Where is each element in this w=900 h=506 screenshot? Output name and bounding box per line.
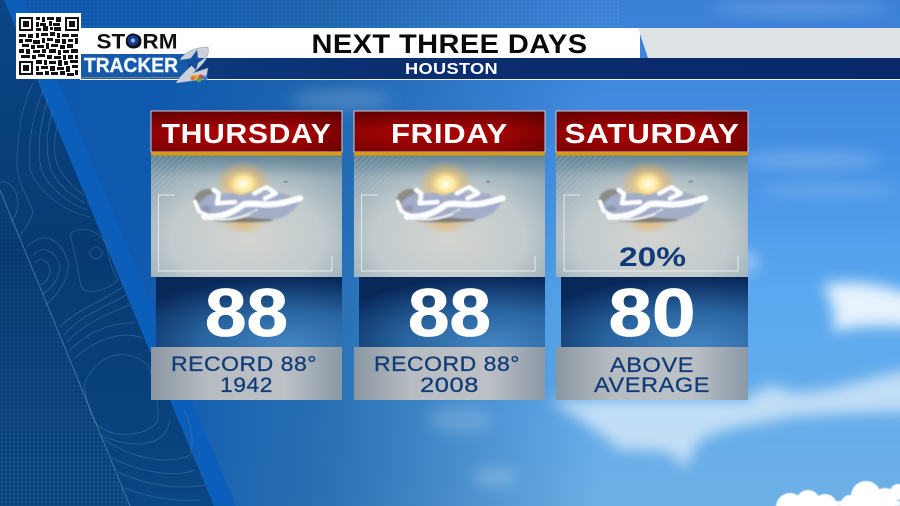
average note: AVERAGE <box>594 373 710 397</box>
icon: sun behind clouds <box>396 161 502 234</box>
icon: sun behind clouds <box>599 161 705 234</box>
record note: 1942 <box>220 373 273 397</box>
record note: RECORD 88° <box>374 352 520 376</box>
precipitation chance: 20% <box>619 242 686 272</box>
average note <box>556 347 748 400</box>
icon: sun behind clouds <box>194 161 300 234</box>
temperature <box>561 275 748 351</box>
logo: Storm Tracker 2: STORM <box>96 30 178 54</box>
record note <box>354 347 545 400</box>
day header <box>151 111 342 156</box>
sky condition area <box>151 156 342 277</box>
logo: Storm Tracker 2 <box>81 30 208 83</box>
temperature: 88 <box>205 275 288 351</box>
temperature <box>156 275 342 351</box>
logo: Storm Tracker 2: TRACKER <box>84 55 179 77</box>
clouds <box>550 282 900 506</box>
left diagonal panel <box>0 0 236 506</box>
sky condition area <box>354 156 545 277</box>
panel: Saturday <box>556 111 748 400</box>
sky condition area <box>556 156 748 277</box>
day header <box>556 111 748 156</box>
record note: RECORD 88° <box>171 352 317 376</box>
day header <box>354 111 545 156</box>
header banner <box>80 28 900 80</box>
QR code <box>16 13 81 79</box>
subtitle: HOUSTON <box>405 61 498 78</box>
temperature: 80 <box>608 275 696 351</box>
average note: ABOVE <box>610 353 694 377</box>
temperature <box>359 275 545 351</box>
record note: 2008 <box>420 373 479 397</box>
record note <box>151 347 342 400</box>
day header: SATURDAY <box>564 118 740 149</box>
panel: Friday <box>354 111 545 400</box>
top dotted band <box>0 0 620 28</box>
temperature: 88 <box>408 275 491 351</box>
title: NEXT THREE DAYS <box>312 29 588 59</box>
day header: FRIDAY <box>391 118 508 149</box>
panel: Thursday <box>151 111 342 400</box>
day header: THURSDAY <box>162 118 332 149</box>
